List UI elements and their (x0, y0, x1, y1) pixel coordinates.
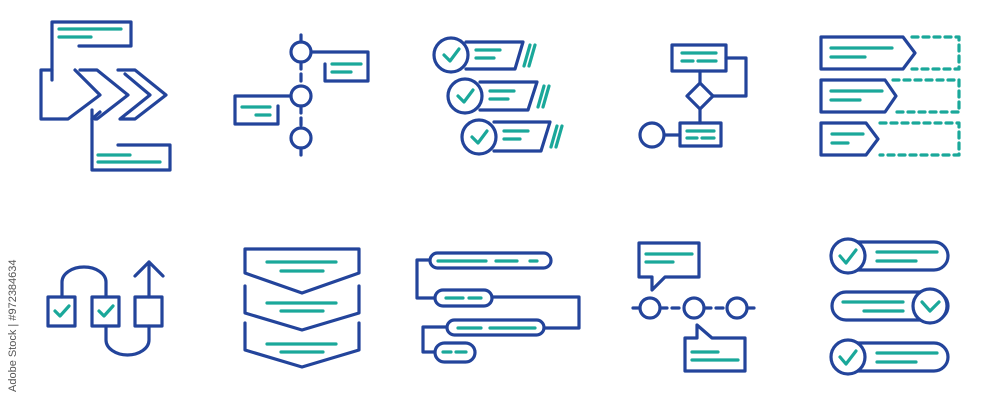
icon: check pill list (831, 239, 948, 374)
watermark text: Adobe Stock | #972384634 (7, 259, 19, 392)
icon: vertical timeline (235, 35, 368, 155)
icon: checklist parallelograms (434, 38, 562, 154)
icon: flowchart (640, 45, 746, 147)
icon: gantt pills (417, 253, 579, 362)
icon: tag list (821, 37, 959, 155)
icon: stacked chevrons (245, 249, 359, 367)
icon: winding path with checkboxes (48, 262, 163, 355)
icon: timeline with speech bubbles (633, 243, 755, 371)
icon: chevron process (41, 22, 170, 170)
